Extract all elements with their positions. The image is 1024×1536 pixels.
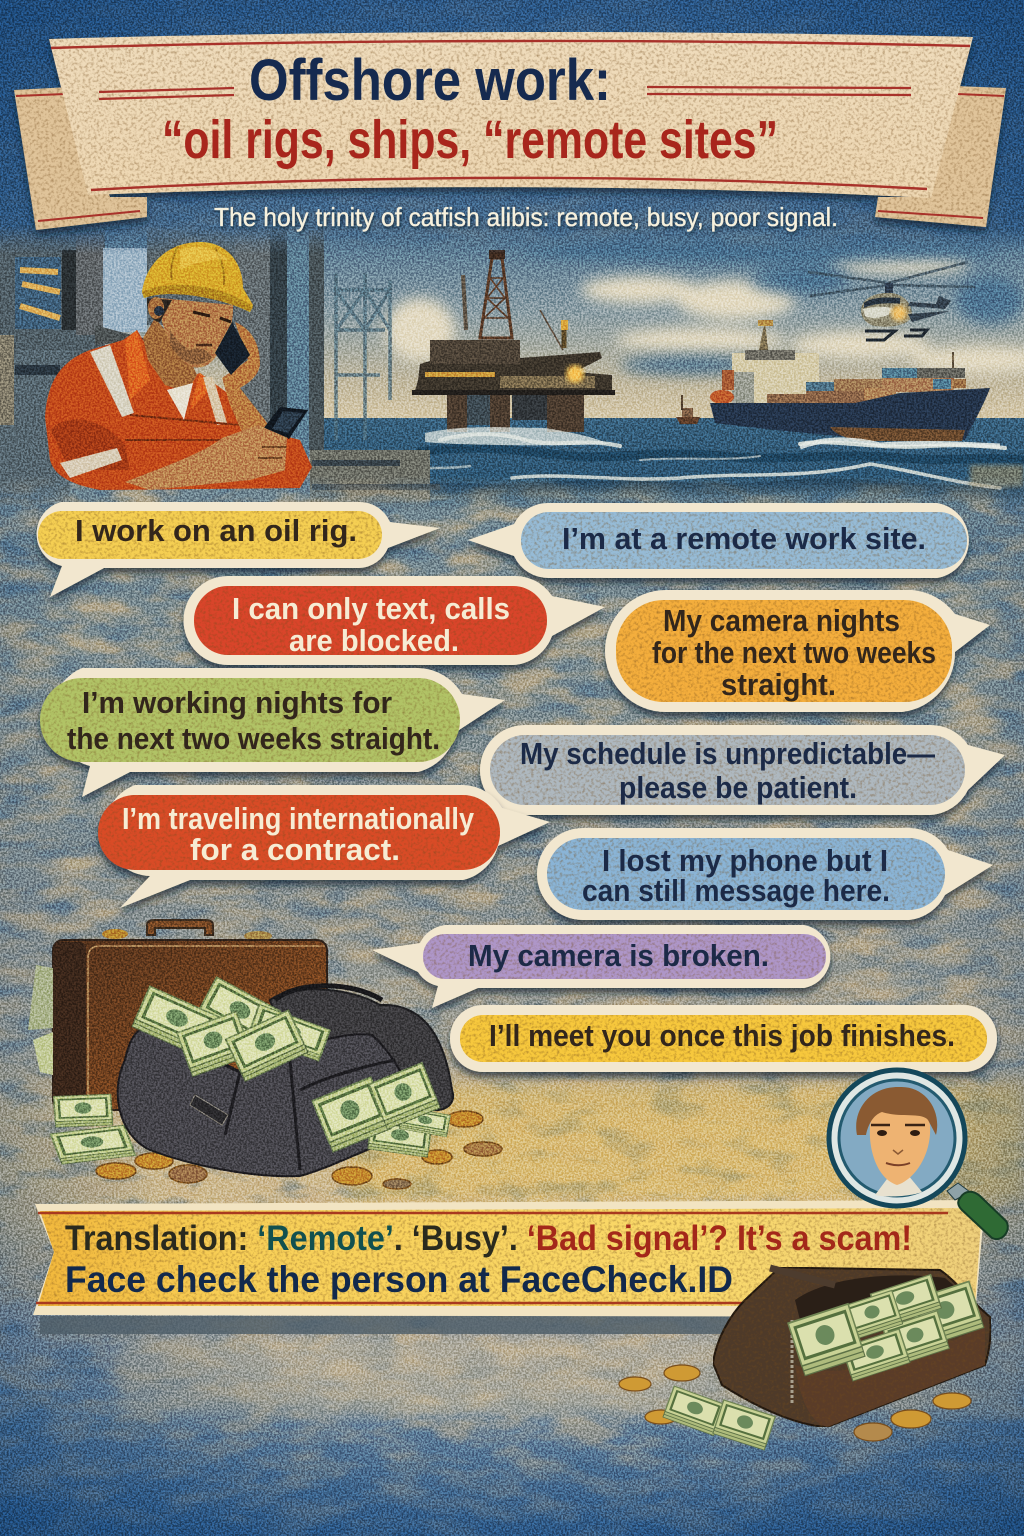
left structures bbox=[0, 225, 440, 520]
title text: Offshore work: bbox=[249, 48, 611, 113]
speech bubble: working nights bbox=[40, 668, 505, 797]
right ribbon bbox=[875, 86, 1006, 227]
raised hand and arm bbox=[222, 322, 278, 450]
sky with clouds bbox=[70, 232, 1024, 418]
cargo ship bbox=[710, 320, 1000, 447]
illustration: offshore scene bbox=[0, 225, 1024, 520]
lower forearm and hand bbox=[125, 425, 292, 490]
distant scaffold bbox=[333, 273, 392, 440]
speech bubble: remote work site bbox=[468, 503, 969, 578]
title banner bbox=[14, 32, 1006, 230]
speech bubble: calls blocked: are blocked. bbox=[289, 623, 459, 658]
speech bubble: traveling internationally bbox=[98, 785, 550, 908]
dark duffel bag behind bbox=[270, 989, 453, 1110]
speech bubble: camera nights bbox=[605, 590, 990, 712]
speech bubble: camera broken bbox=[372, 925, 830, 1008]
speech bubble: unpredictable schedule: please be patient. bbox=[619, 770, 857, 805]
speech bubble: camera broken: My camera is broken. bbox=[468, 938, 769, 973]
face portrait bbox=[875, 1175, 922, 1196]
speech bubble: camera nights: for the next two weeks bbox=[652, 635, 936, 670]
speech bubble: lost phone: can still message here. bbox=[582, 873, 890, 908]
stack on ground bbox=[663, 1386, 725, 1436]
hard hat bbox=[142, 242, 253, 312]
phone in hand bbox=[260, 407, 308, 442]
speech bubble: meet after job bbox=[450, 1005, 997, 1072]
oil rig bbox=[412, 250, 615, 445]
cash bundles front bbox=[368, 1118, 431, 1157]
speech bubble: camera nights: My camera nights bbox=[663, 603, 900, 638]
main scroll bbox=[49, 32, 973, 198]
bag cash bbox=[909, 1281, 984, 1347]
worker on phone bbox=[45, 242, 312, 490]
handle bbox=[947, 1183, 970, 1200]
face bbox=[160, 298, 233, 368]
speech bubble: traveling internationally: for a contract. bbox=[190, 832, 400, 867]
speech bubble: unpredictable schedule: My schedule is unpredictable— bbox=[520, 736, 935, 771]
speech bubble: oil rig bbox=[37, 502, 440, 597]
subtitle: The holy trinity of catfish alibis: remote, busy, poor signal. bbox=[214, 202, 838, 232]
magnifier with face bbox=[829, 1070, 1008, 1239]
illustration: brown bag with cash bbox=[619, 1267, 991, 1450]
neck and shirt bbox=[143, 318, 197, 392]
phone at ear bbox=[215, 322, 250, 375]
dark duffel bag front bbox=[118, 1027, 425, 1176]
coins beneath duffel bbox=[96, 1111, 502, 1189]
title banner: “oil rigs, ships, “remote sites” bbox=[162, 110, 778, 170]
speech bubble: remote work site: I’m at a remote work site. bbox=[562, 521, 926, 556]
speech bubble: unpredictable schedule bbox=[480, 725, 1005, 815]
speech bubble: traveling internationally: I’m traveling internationally bbox=[122, 801, 475, 836]
translation line: Translation: ‘Remote’. ‘Busy’. ‘Bad signal’? It’s a scam! bbox=[65, 1219, 912, 1258]
small tug boat bbox=[676, 395, 700, 424]
left ribbon bbox=[14, 87, 147, 230]
speech bubble: working nights: the next two weeks straight. bbox=[67, 721, 440, 756]
speech bubble: working nights: I’m working nights for bbox=[82, 685, 392, 720]
cash piles left bbox=[54, 1094, 113, 1127]
cash bundles in duffel bbox=[196, 977, 280, 1050]
helicopter bbox=[808, 262, 975, 340]
brown suitcase bbox=[28, 920, 327, 1110]
speech bubble: lost phone bbox=[537, 828, 993, 920]
speech bubble: meet after job: I’ll meet you once this job finishes. bbox=[489, 1018, 955, 1053]
speech bubble: oil rig: I work on an oil rig. bbox=[75, 513, 357, 548]
sea and waves bbox=[320, 418, 1024, 510]
illustration: suitcase and duffel of cash bbox=[28, 920, 502, 1189]
call to action: Face check the person at FaceCheck.ID bbox=[65, 1259, 733, 1300]
translation banner bbox=[33, 1200, 985, 1334]
bag body bbox=[713, 1267, 991, 1427]
orange coverall bbox=[45, 330, 312, 490]
lens bbox=[829, 1070, 965, 1206]
speech bubble: calls blocked bbox=[184, 576, 605, 665]
speech bubble: lost phone: I lost my phone but I bbox=[602, 843, 888, 878]
coins bbox=[619, 1365, 971, 1441]
speech bubble: calls blocked: I can only text, calls bbox=[232, 591, 510, 626]
speech bubble: camera nights: straight. bbox=[721, 667, 836, 702]
